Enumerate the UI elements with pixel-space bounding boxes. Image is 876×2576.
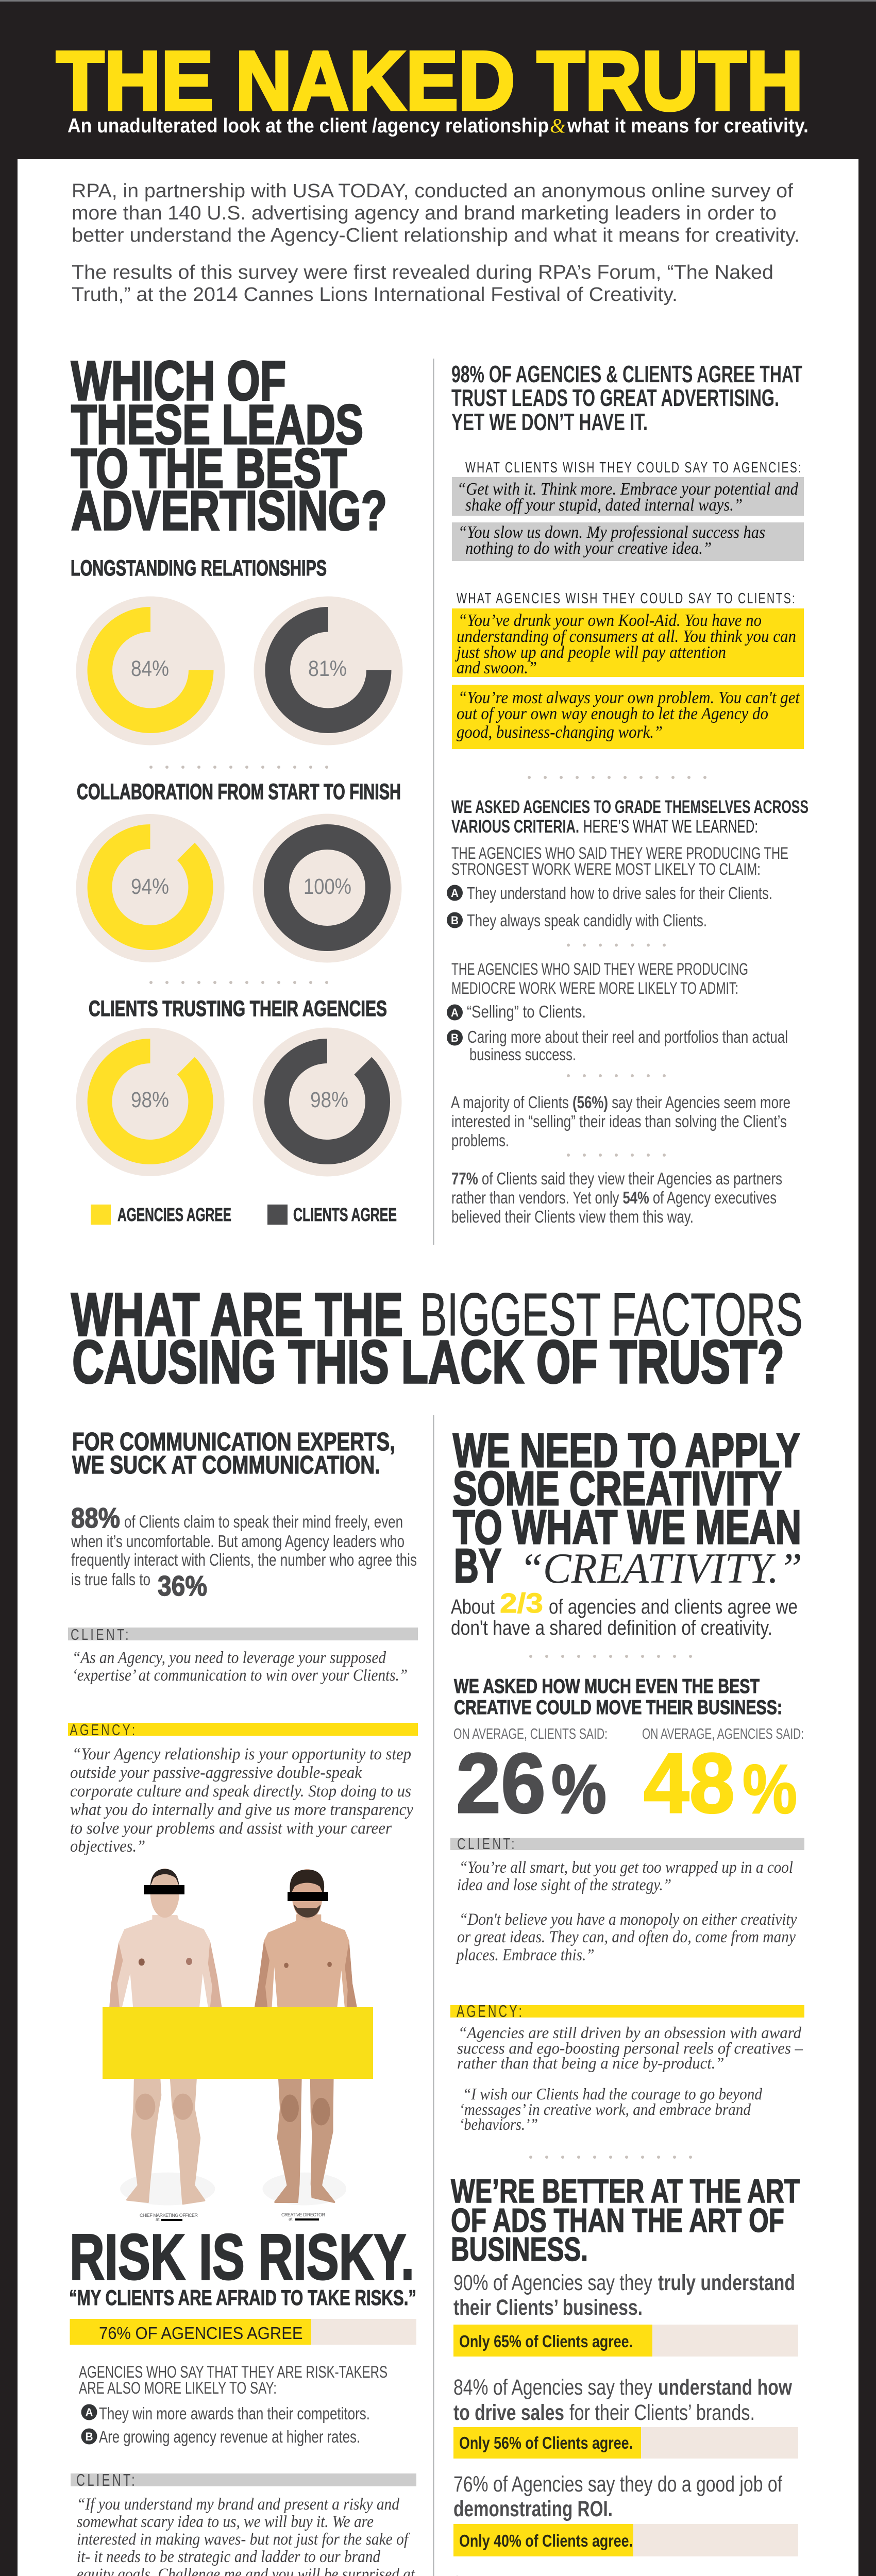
stat: understand business: 90% of Agencies say they <box>453 2270 652 2295</box>
badge B: B <box>86 2430 93 2443</box>
caption: right: at <box>289 2216 293 2222</box>
heading: ADVERTISING? <box>71 479 387 541</box>
list item: Caring more about their reel and portfolios than actual <box>467 1027 788 1046</box>
heading: grade themselves: HERE’S WHAT WE LEARNED: <box>583 817 758 837</box>
intro text: Truth,” at the 2014 Cannes Lions International Festival of Creativity. <box>72 284 678 306</box>
bar: 40% <box>453 2524 798 2556</box>
client quote: somewhat scary idea to us, we will buy it. We are <box>77 2513 374 2531</box>
caption: right: CREATIVE DIRECTOR <box>281 2212 326 2217</box>
bar: 56% <box>453 2427 798 2459</box>
subheading: clients trusting: CLIENTS TRUSTING THEIR AGENCIES <box>89 996 387 1021</box>
text: majority of clients: problems. <box>451 1131 509 1150</box>
heading: “CREATIVITY.” <box>519 1545 802 1592</box>
legend: CLIENTS AGREE <box>293 1204 397 1225</box>
stat: agencies 48%: ON AVERAGE, AGENCIES SAID: <box>642 1726 804 1742</box>
text: 2/3: don't have a shared definition of creativity. <box>451 1617 772 1639</box>
client quote: interested in making waves- but not just for the sake of <box>77 2530 410 2549</box>
stat: agencies 48%: 48 <box>644 1736 735 1831</box>
client quote <box>72 1649 408 1685</box>
heading: OF ADS THAN THE ART OF <box>451 2201 784 2239</box>
text: 77% partners <box>451 1169 782 1226</box>
quote box: own problem <box>452 685 804 749</box>
stat: agencies 48%: % <box>743 1750 797 1828</box>
bar: 65%: Only 65% of Clients agree. <box>459 2332 633 2351</box>
stat: demonstrating ROI: demonstrating ROI. <box>453 2497 613 2521</box>
agency quote: objectives.” <box>70 1837 145 1856</box>
text: 77% partners: 77% of Clients said they view their Agencies as partners <box>451 1169 782 1188</box>
bar: 40%: Only 40% of Clients agree. <box>459 2531 633 2550</box>
stat text: is true falls to <box>71 1570 150 1589</box>
agency quote: success and ego-boosting personal reels of creatives – <box>457 2039 803 2057</box>
stat: drive sales: for their Clients’ brands. <box>569 2400 755 2425</box>
text: majority of clients: interested in “selling” their ideas than solving the Client’s <box>451 1112 787 1131</box>
subtitle: & <box>550 115 566 137</box>
stat: drive sales: 84% of Agencies say they <box>453 2375 652 2400</box>
client bar <box>68 1625 418 1643</box>
heading: TO THE BEST <box>71 437 347 499</box>
heading: how much: CREATIVE COULD MOVE THEIR BUSINESS: <box>454 1697 782 1719</box>
quote box: get with it: shake off your stupid, dated internal ways.” <box>465 496 743 515</box>
caption: right <box>281 2212 326 2222</box>
donut: clients 98%: 98% <box>310 1088 348 1112</box>
text: 2/3: of agencies and clients agree we <box>549 1596 798 1618</box>
badge A: A <box>451 1006 459 1019</box>
quote box: kool-aid: understanding of consumers at all. You think you can <box>457 627 796 646</box>
quote box: get with it <box>452 477 804 516</box>
donut: clients 98% <box>252 1027 402 1177</box>
donut: clients 81% <box>254 597 403 745</box>
stat: demonstrating ROI: 76% of Agencies say they do a good job of <box>453 2472 783 2497</box>
stat: drive sales: to drive sales <box>453 2400 564 2425</box>
client quote: “Don't believe you have a monopoly on either creativity <box>459 1910 797 1929</box>
client quote <box>456 1858 797 1964</box>
agency quote <box>457 2023 803 2133</box>
big heading: biggest factors <box>71 1281 803 1396</box>
caption: left <box>140 2213 198 2222</box>
agency bar <box>450 2002 804 2021</box>
subheading: collaboration: COLLABORATION FROM START TO FINISH <box>77 779 401 804</box>
panel: which leads to best advertising <box>71 349 403 1225</box>
intro text: RPA, in partnership with USA TODAY, conducted an anonymous online survey of <box>72 180 793 202</box>
agency quote: corporate culture and speak directly. Stop doing to us <box>70 1782 411 1801</box>
intro text: more than 140 U.S. advertising agency and brand marketing leaders in order to <box>72 202 777 224</box>
agency quote: “I wish our Clients had the courage to go beyond <box>463 2084 763 2103</box>
legend <box>91 1204 397 1225</box>
badge A <box>447 1005 463 1020</box>
quote box: own problem: “You’re most always your own problem. You can't get <box>458 688 800 707</box>
badge A: A <box>86 2406 93 2419</box>
legend: AGENCIES AGREE <box>117 1204 231 1225</box>
stat text: frequently interact with Clients, the number who agree this <box>71 1550 417 1569</box>
client quote: it- it needs to be strategic and ladder to our brand <box>77 2548 380 2566</box>
intro text: The results of this survey were first revealed during RPA’s Forum, “The Naked <box>72 262 773 283</box>
progress bar: 76%: 76% OF AGENCIES AGREE <box>99 2324 303 2343</box>
panel: communication <box>68 1428 418 1856</box>
badge A: A <box>451 887 459 900</box>
text: risk takers: ARE ALSO MORE LIKELY TO SAY: <box>79 2379 277 2397</box>
heading: how much: WE ASKED HOW MUCH EVEN THE BEST <box>454 1675 760 1698</box>
client quote: places. Embrace this.” <box>456 1946 595 1964</box>
badge B <box>447 1029 463 1046</box>
stat: drive sales: understand how <box>658 2375 792 2400</box>
agency bar: AGENCY: <box>70 1721 137 1739</box>
bar: 65% <box>453 2325 798 2357</box>
heading <box>71 349 387 541</box>
client quote: ‘expertise’ at communication to win over your Clients.” <box>72 1666 408 1685</box>
donut: clients 81%: 81% <box>308 656 347 681</box>
list item: They win more awards than their competitors. <box>99 2404 370 2423</box>
heading: how much <box>454 1675 782 1719</box>
stat text: 36% <box>158 1570 207 1602</box>
client quote: “As an Agency, you need to leverage your supposed <box>72 1649 386 1667</box>
heading: 98% agree <box>451 361 802 435</box>
quote box: own problem: good, business-changing work.” <box>457 723 663 742</box>
panel: trust and wishes <box>447 361 808 1226</box>
stat: drive sales <box>453 2375 792 2425</box>
donut: agencies 94% <box>76 814 225 962</box>
censor bar: right <box>288 1892 328 1901</box>
text: 2/3: About <box>451 1596 495 1618</box>
client quote: idea and lose sight of the strategy.” <box>457 1876 671 1894</box>
big heading: biggest factors: WHAT ARE THE <box>71 1281 403 1349</box>
donut: agencies 84% <box>76 597 225 745</box>
donut: clients 100%: 100% <box>304 874 351 899</box>
badge B: B <box>451 914 459 927</box>
agency quote: outside your passive-aggressive double-speak <box>70 1764 362 1782</box>
text: mediocre work: MEDIOCRE WORK WERE MORE LIKELY TO ADMIT: <box>451 979 738 997</box>
text: 77% partners: believed their Clients view them this way. <box>451 1207 694 1226</box>
heading: FOR COMMUNICATION EXPERTS, <box>72 1428 395 1456</box>
agency quote: what you do internally and give us more transparency <box>70 1801 413 1819</box>
client bar: CLIENT: <box>457 1835 517 1853</box>
badge A <box>447 885 463 901</box>
panel: art of business <box>450 2172 804 2576</box>
stat: understand business: their Clients’ business. <box>453 2295 643 2320</box>
quote box: kool-aid <box>452 608 804 677</box>
list item: “Selling” to Clients. <box>467 1002 586 1021</box>
badge B <box>81 2429 97 2444</box>
client quote: “If you understand my brand and present a risky and <box>77 2495 399 2514</box>
progress bar: 76% <box>70 2319 416 2345</box>
caption: left: CHIEF MARKETING OFFICER <box>140 2213 198 2218</box>
client quote <box>77 2495 415 2576</box>
text: 2/3 <box>451 1588 798 1639</box>
heading: BY <box>454 1539 501 1592</box>
stat: understand business <box>453 2270 795 2320</box>
caption: left: at <box>156 2217 160 2222</box>
list item: Are growing agency revenue at higher rates. <box>99 2427 360 2446</box>
list item: business success. <box>469 1045 576 1064</box>
text: mediocre work: THE AGENCIES WHO SAID THEY WERE PRODUCING <box>451 960 748 978</box>
list item <box>467 1027 788 1064</box>
subheading: longstanding relationships: LONGSTANDING RELATIONSHIPS <box>71 556 327 581</box>
quote box: you slow us down <box>452 522 804 561</box>
quote box: kool-aid: “You’ve drunk your own Kool-Aid. You have no <box>458 611 762 630</box>
bar: 56%: Only 56% of Clients agree. <box>459 2433 633 2452</box>
quote box: kool-aid: just show up and people will pay attention <box>454 643 726 662</box>
badge A <box>81 2404 97 2420</box>
stat text <box>71 1502 417 1602</box>
intro text <box>72 180 800 306</box>
text: strongest work: STRONGEST WORK WERE MOST LIKELY TO CLAIM: <box>451 860 761 878</box>
subtitle: what it means for creativity. <box>567 115 808 137</box>
donut: agencies 94%: 94% <box>131 874 169 899</box>
text: risk takers: AGENCIES WHO SAY THAT THEY ARE RISK-TAKERS <box>79 2363 388 2381</box>
heading: WE SUCK AT COMMUNICATION. <box>72 1451 380 1479</box>
client bar <box>450 1835 804 1853</box>
heading: SOME CREATIVITY <box>453 1462 782 1515</box>
agency quote: “Agencies are still driven by an obsession with award <box>458 2023 802 2042</box>
panel: risk is risky <box>69 2222 416 2576</box>
stat text: when it’s uncomfortable. But among Agency leaders who <box>71 1532 405 1551</box>
client quote: “You’re all smart, but you get too wrapped up in a cool <box>459 1858 793 1877</box>
client bar <box>71 2470 416 2489</box>
quote box: you slow us down: “You slow us down. My professional success has <box>458 523 765 542</box>
stat: clients 26%: % <box>551 1750 607 1828</box>
donut: agencies 98% <box>76 1028 225 1176</box>
text: majority of clients: A majority of Clients (56%) say their Agencies seem more <box>451 1093 790 1112</box>
text: strongest work <box>451 844 788 878</box>
intro text: better understand the Agency-Client relationship and what it means for creativity. <box>72 225 800 246</box>
stat text: of Clients claim to speak their mind freely, even <box>124 1512 403 1531</box>
stat text: 88% <box>71 1502 120 1534</box>
text: 2/3: 2/3 <box>500 1588 543 1619</box>
list item: They understand how to drive sales for their Clients. <box>467 884 772 903</box>
client bar: CLIENT: <box>71 1625 131 1643</box>
censor bar: left <box>144 1885 184 1894</box>
heading: grade themselves: VARIOUS CRITERIA. <box>451 817 579 837</box>
quote box: own problem: out of your own way enough to let the Agency do <box>457 704 768 723</box>
heading: grade themselves <box>451 797 808 837</box>
heading: THESE LEADS <box>71 393 363 455</box>
title: THE NAKED TRUTH <box>56 33 803 128</box>
right man <box>254 1869 358 2206</box>
stat: clients 26%: 26 <box>456 1736 546 1831</box>
quote box: you slow us down: nothing to do with your creative idea.” <box>465 539 712 558</box>
subtitle: An unadulterated look at the client /agency relationship <box>68 115 549 137</box>
quote box: kool-aid: and swoon.” <box>457 658 537 677</box>
agency quote: ‘messages’ in creative work, and embrace brand <box>459 2100 751 2119</box>
stat: clients 26% <box>453 1726 608 1831</box>
agency quote: to solve your problems and assist with your career <box>70 1819 392 1838</box>
donut: agencies 98%: 98% <box>131 1088 169 1112</box>
donut: agencies 84%: 84% <box>131 656 169 681</box>
agency quote <box>70 1745 413 1856</box>
agency bar <box>68 1721 418 1739</box>
stat: agencies 48% <box>642 1726 804 1831</box>
stat: understand business: truly understand <box>658 2270 795 2295</box>
list item: They always speak candidly with Clients. <box>467 911 707 930</box>
badge B <box>447 912 463 928</box>
subheading: “MY CLIENTS ARE AFRAID TO TAKE RISKS.” <box>69 2285 416 2310</box>
left man <box>109 1869 223 2206</box>
photo: two men with censor bars <box>103 1869 373 2222</box>
agency bar: AGENCY: <box>457 2002 524 2021</box>
heading: BUSINESS. <box>451 2230 588 2268</box>
stat: clients 26%: ON AVERAGE, CLIENTS SAID: <box>453 1726 608 1742</box>
quote box: get with it: “Get with it. Think more. Embrace your potential and <box>457 480 799 499</box>
text: majority of clients <box>451 1093 790 1150</box>
stat: demonstrating ROI <box>453 2472 783 2521</box>
header <box>56 33 808 137</box>
text: risk takers <box>79 2363 388 2397</box>
agency quote: ‘behaviors.’” <box>459 2115 538 2133</box>
agency quote: “Your Agency relationship is your opportunity to step <box>72 1745 411 1764</box>
yellow censor block <box>103 2007 373 2079</box>
client bar: CLIENT: <box>76 2470 137 2489</box>
text: mediocre work <box>451 960 748 997</box>
heading <box>453 1423 802 1592</box>
heading: 98% agree: YET WE DON’T HAVE IT. <box>451 409 648 435</box>
heading <box>72 1428 395 1479</box>
heading <box>451 2172 800 2268</box>
panel: creativity <box>450 1423 804 2157</box>
badge B: B <box>451 1031 459 1044</box>
text: 77% partners: rather than vendors. Yet only 54% of Agency executives <box>451 1188 777 1207</box>
agency quote: rather than that being a nice by-product.” <box>457 2054 725 2072</box>
client quote: or great ideas. They can, and often do, come from many <box>457 1928 796 1946</box>
heading: WHICH OF <box>71 349 286 412</box>
heading: RISK IS RISKY. <box>70 2222 414 2293</box>
donut: clients 100% <box>252 814 402 962</box>
